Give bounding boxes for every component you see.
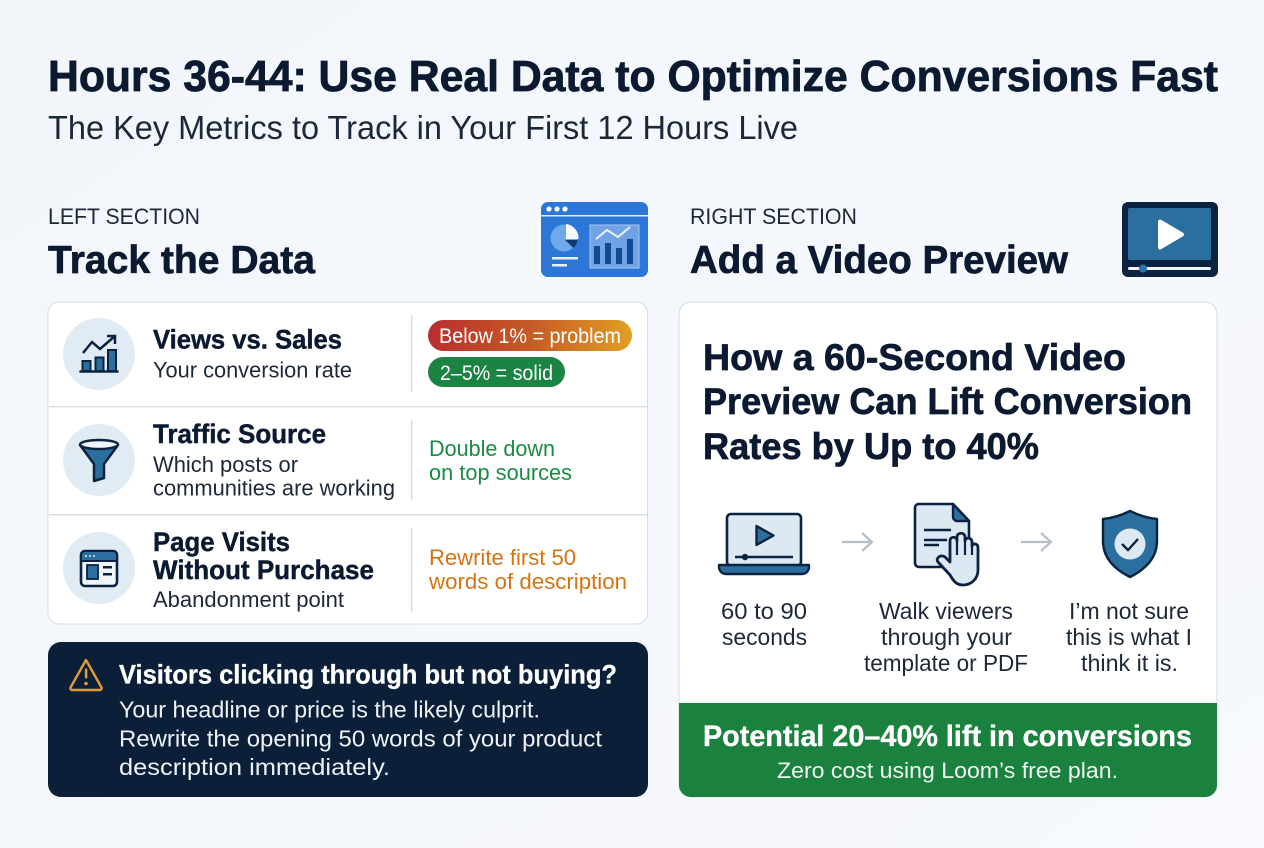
panel: track the data metrics [48, 302, 648, 624]
metric description [153, 452, 395, 500]
metric description: Which posts or [153, 452, 298, 477]
step label: not sure: think it is. [1081, 650, 1178, 676]
panel heading: How a 60-Second Video [703, 337, 1126, 378]
step label: walk viewers: template or PDF [864, 650, 1028, 676]
badge: below 1%: Below 1% = problem [439, 325, 621, 348]
metric description: Your conversion rate [153, 358, 352, 382]
banner headline: Potential 20–40% lift in conversions [703, 720, 1192, 753]
row: views vs sales [63, 315, 632, 392]
subtitle: The Key Metrics to Track in Your First 12 Hours Live [48, 109, 798, 146]
right section eyebrow: RIGHT SECTION [690, 204, 857, 229]
panel: video preview [679, 302, 1217, 797]
panel heading: Preview Can Lift Conversion [703, 381, 1192, 422]
badge: 2-5% solid [428, 357, 565, 387]
metric description: Abandonment point [153, 587, 344, 612]
panel heading: Rates by Up to 40% [703, 426, 1039, 467]
advice: double down: on top sources [429, 460, 572, 485]
step label: walk viewers [864, 598, 1028, 676]
title: Hours 36-44: Use Real Data to Optimize Conversions Fast [48, 53, 1218, 101]
icon: video player [1122, 202, 1218, 277]
step label: not sure: I’m not sure [1069, 598, 1189, 624]
callout heading: Visitors clicking through but not buying? [119, 660, 617, 690]
row: page visits without purchase [63, 527, 627, 612]
banner subtext: Zero cost using Loom’s free plan. [777, 758, 1118, 783]
icon: analytics dashboard window [541, 202, 648, 277]
left section heading: Track the Data [48, 239, 315, 282]
step label: walk viewers: through your [881, 624, 1012, 650]
metric title: Traffic Source [153, 419, 326, 449]
step label: 60 to 90 seconds [721, 598, 807, 650]
panel heading [703, 337, 1192, 467]
advice: double down: Double down [429, 436, 555, 461]
metric description: communities are working [153, 476, 395, 500]
icon: funnel [63, 424, 135, 496]
callout body: description immediately. [119, 754, 390, 780]
metric title: Page Visits [153, 527, 290, 557]
left section eyebrow: LEFT SECTION [48, 204, 200, 229]
icon: shield with check [1103, 511, 1157, 577]
arrow [1021, 533, 1051, 551]
icon: laptop with video [719, 514, 809, 574]
step label: not sure: this is what I [1066, 624, 1192, 650]
step label: not sure [1066, 598, 1192, 676]
icon: browser window [63, 532, 135, 604]
step label: 60 to 90 seconds: seconds [722, 624, 807, 650]
metric title [153, 527, 374, 585]
callout body: Your headline or price is the likely culprit. [119, 696, 540, 722]
metric title: Without Purchase [153, 555, 374, 585]
advice: double down [429, 436, 572, 485]
metric title: Views vs. Sales [153, 324, 342, 354]
advice: rewrite [428, 545, 627, 594]
callout: visitors not buying [48, 642, 648, 797]
arrow [842, 533, 872, 551]
step label: walk viewers: Walk viewers [879, 598, 1013, 624]
row: traffic source [63, 419, 572, 500]
callout body: Rewrite the opening 50 words of your product [119, 726, 603, 752]
callout body [119, 696, 603, 780]
icon: document with hand [915, 504, 978, 585]
banner: potential lift [679, 703, 1217, 797]
advice: rewrite: words of description [428, 569, 627, 594]
icon: warning triangle [70, 660, 102, 690]
icon: rising bar chart [63, 318, 135, 390]
badge: 2-5% solid: 2–5% = solid [440, 362, 553, 385]
step label: 60 to 90 seconds: 60 to 90 [721, 598, 807, 624]
right section heading: Add a Video Preview [690, 239, 1069, 282]
advice: rewrite: Rewrite first 50 [429, 545, 576, 570]
